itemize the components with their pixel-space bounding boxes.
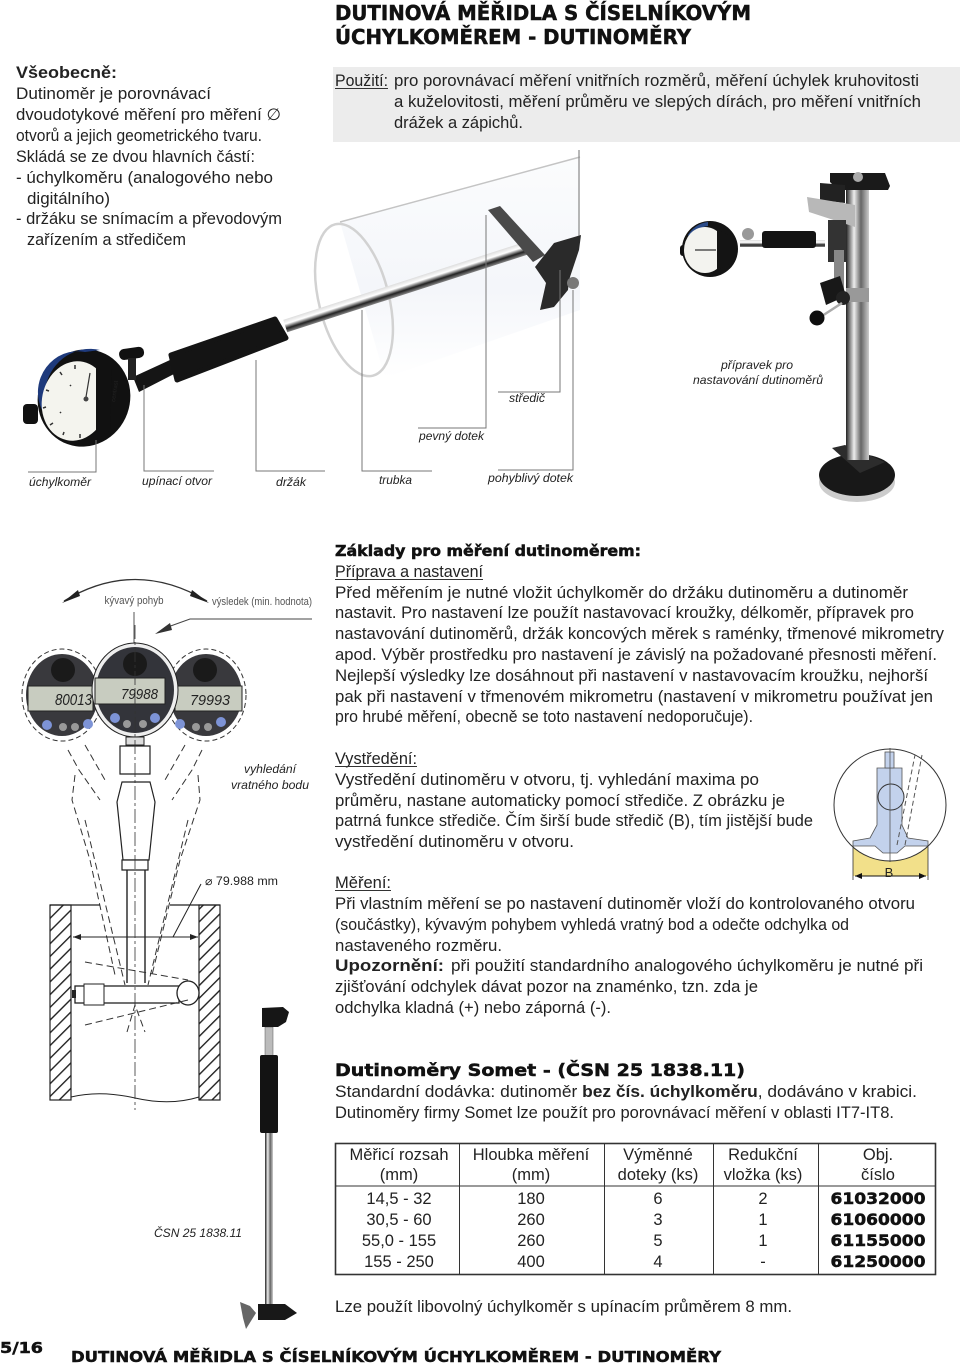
text block: centering: Vystředění: (335, 750, 417, 768)
text block: general description: Dutinoměr je porovnávací (16, 85, 211, 103)
sub-element: center digital dial (92, 643, 178, 737)
title: ÚCHYLKOMĚREM - DUTINOMĚRY (335, 25, 692, 49)
title (335, 1, 751, 49)
heading: Somet gauges: Dutinoměry Somet - (ČSN 25 1838.11) (335, 1059, 745, 1081)
panel: usage: pro porovnávací měření vnitřních rozměrů, měření úchylek kruhovitosti (394, 72, 919, 90)
text block: measuring basics: pro hrubé měření, obecně se toto nastavení nedoporučuje). (335, 708, 753, 726)
label: turning point: vyhledání (244, 762, 298, 776)
table header: Hloubka měření (473, 1146, 590, 1164)
table rows: 3 (653, 1211, 663, 1229)
label: turning point (231, 762, 309, 792)
text block: general description: Všeobecně: (16, 64, 117, 82)
table header: číslo (861, 1166, 895, 1184)
text block: measuring basics: Příprava a nastavení (335, 563, 483, 581)
text block: centering: průměru, nastane automaticky pomocí střediče. Z obrázku je (335, 792, 785, 810)
text block: measurement: odchylka kladná (+) nebo záporná (-). (335, 999, 611, 1017)
text block: measurement: Měření: (335, 874, 391, 892)
callouts: gauge part labels (28, 215, 574, 489)
heading: Somet gauges: Dutinoměry firmy Somet lze použít pro porovnávací měření v oblasti IT7-IT8. (335, 1104, 894, 1122)
diagram: centering detail (834, 748, 946, 880)
text block: measuring basics: nastavit. Pro nastavení lze použít nastavovací kroužky, délkoměr, přípravek pro (335, 604, 914, 622)
text block: general description: - držáku se snímacím a převodovým (16, 210, 282, 228)
text block: general description: - úchylkoměru (analogového nebo (16, 169, 273, 187)
table rows (362, 1189, 926, 1271)
label: turning point: vratného bodu (231, 778, 309, 792)
table rows: 180 (517, 1190, 545, 1208)
sub-element: right digital dial (166, 649, 246, 741)
callouts: gauge part labels: úchylkoměr (29, 475, 92, 489)
table rows: 4 (653, 1253, 663, 1271)
text block: centering: vystředění dutinoměru v otvoru. (335, 833, 574, 851)
callouts: gauge part labels: trubka (379, 473, 412, 487)
page number: 5/16 (0, 1339, 43, 1357)
table header: Obj. (863, 1146, 893, 1164)
table rows: - (760, 1253, 766, 1271)
text block: general description: Skládá se ze dvou hlavních částí: (16, 148, 255, 166)
table rows: 61155000 (830, 1231, 926, 1250)
text block: measuring basics: Nejlepší výsledky lze dosáhnout při nastavení v nastavovacím kroužku, nejhorší (335, 667, 928, 685)
text block: measuring basics: nastavování dutinoměrů, držák koncových měrek s raménky, třmenové mikrometry (335, 625, 945, 643)
table rows: 155 - 250 (364, 1253, 434, 1271)
label: setting stand: nastavování dutinoměrů (693, 373, 823, 387)
panel: usage: a kuželovitosti, měření průměru ve slepých dírách, pro měření vnitřních (394, 93, 921, 111)
text block: measuring basics (335, 542, 945, 726)
table header (349, 1146, 895, 1184)
text block: measurement: (součástky), kývavým pohybem vyhledá vratný bod a odečte odchylka od (335, 916, 849, 934)
text block: measurement: Upozornění: (335, 957, 444, 975)
table rows: 1 (758, 1211, 768, 1229)
panel: usage: drážek a zápichů. (394, 114, 523, 132)
table rows: 61032000 (830, 1189, 926, 1208)
diagram: digital gauge searching turning point: ⌀ 79.988 mm (205, 876, 278, 888)
table rows: 6 (653, 1190, 663, 1208)
diagram: centering detail: B (885, 865, 893, 880)
text block: centering (335, 750, 813, 851)
table rows: 400 (517, 1253, 545, 1271)
table rows: 260 (517, 1211, 545, 1229)
table rows: 14,5 - 32 (366, 1190, 432, 1208)
table rows: 1 (758, 1232, 768, 1250)
title: DUTINOVÁ MĚŘIDLA S ČÍSELNÍKOVÝM (335, 1, 751, 25)
text block: measuring basics: Před měřením je nutné vložit úchylkoměr do držáku dutinoměru a dutinoměr (335, 584, 909, 602)
note below table: Lze použít libovolný úchylkoměr s upínacím průměrem 8 mm. (335, 1298, 792, 1316)
table header: Redukční (728, 1146, 798, 1164)
callouts: gauge part labels: držák (276, 475, 307, 489)
callouts: gauge part labels: pevný dotek (418, 429, 485, 443)
text block: measurement: Při vlastním měření se po nastavení dutinoměr vloží do kontrolovaného otvoru (335, 895, 915, 913)
sub-element: left digital dial (22, 649, 102, 741)
sub-element: center digital dial: 79988 (121, 686, 159, 703)
table rows: 61250000 (830, 1252, 926, 1271)
text block: general description: otvorů a jejich geometrického tvaru. (16, 127, 262, 145)
sub-element: right digital dial: 79993 (190, 692, 231, 709)
table: gauge sizes (335, 1143, 936, 1275)
table rows: 5 (653, 1232, 663, 1250)
text block: general description: zařízením a středičem (27, 231, 186, 249)
label: setting stand: přípravek pro (720, 358, 793, 372)
callouts: gauge part labels: upínací otvor (142, 474, 213, 488)
sub-element: left digital dial: 80013 (55, 692, 92, 709)
sub-element: bore with hatched walls (50, 905, 220, 1102)
text block: measurement: při použití standardního analogového úchylkoměru je nutné při (451, 957, 923, 975)
photo: standalone bore gauge (240, 1007, 297, 1329)
photo: bore gauge in tube: centrast (111, 380, 120, 402)
photo: bore gauge in tube (23, 150, 581, 460)
table rows: 55,0 - 155 (362, 1232, 436, 1250)
text block: centering: patrná funkce střediče. Čím širší bude středič (B), tím jistější bude (335, 811, 813, 830)
text block: general description (16, 64, 282, 249)
diagram: digital gauge searching turning point (22, 580, 312, 1110)
photo: setting stand (680, 172, 895, 502)
text block: measurement: zjišťování odchylek dávat pozor na znaménko, tzn. zda je (335, 978, 758, 996)
table header: Měřicí rozsah (349, 1146, 449, 1164)
table rows: 260 (517, 1232, 545, 1250)
text block: measurement: nastaveného rozměru. (335, 937, 502, 955)
text block: measuring basics: pak při nastavení v třmenovém mikrometru (nastavení v mikrometru používat jen (335, 688, 933, 706)
table rows: 2 (758, 1190, 768, 1208)
label: setting stand (693, 358, 823, 387)
text block: measurement (335, 874, 923, 1017)
text block: general description: dvoudotykové měření pro měření ∅ (16, 106, 281, 124)
callouts: gauge part labels: středič (509, 391, 545, 405)
text block: measuring basics: Základy pro měření dutinoměrem: (335, 542, 641, 560)
text block: measuring basics: apod. Výběr prostředku pro nastavení je závislý na požadované přesnosti měření. (335, 646, 937, 664)
heading: Somet gauges (335, 1059, 917, 1122)
heading: Somet gauges: Standardní dodávka: dutinoměr bez čís. úchylkoměru , dodáváno v krabici. (335, 1083, 917, 1101)
table header: (mm) (380, 1166, 418, 1184)
text block: general description: digitálního) (27, 190, 110, 208)
table rows: 61060000 (830, 1210, 926, 1229)
text block: centering: Vystředění dutinoměru v otvoru, tj. vyhledání maxima po (335, 771, 759, 789)
table header: doteky (ks) (618, 1166, 698, 1184)
diagram: digital gauge searching turning point: kývavý pohyb (104, 595, 164, 607)
panel: usage: Použití: (335, 72, 388, 90)
callouts: gauge part labels: pohyblivý dotek (487, 471, 574, 485)
panel: usage (333, 67, 960, 142)
label: standard number: ČSN 25 1838.11 (154, 1225, 242, 1240)
table header: (mm) (512, 1166, 550, 1184)
table header: Výměnné (623, 1146, 693, 1164)
table rows: 30,5 - 60 (366, 1211, 432, 1229)
diagram: digital gauge searching turning point: výsledek (min. hodnota) (212, 596, 312, 608)
table header: vložka (ks) (724, 1166, 802, 1184)
